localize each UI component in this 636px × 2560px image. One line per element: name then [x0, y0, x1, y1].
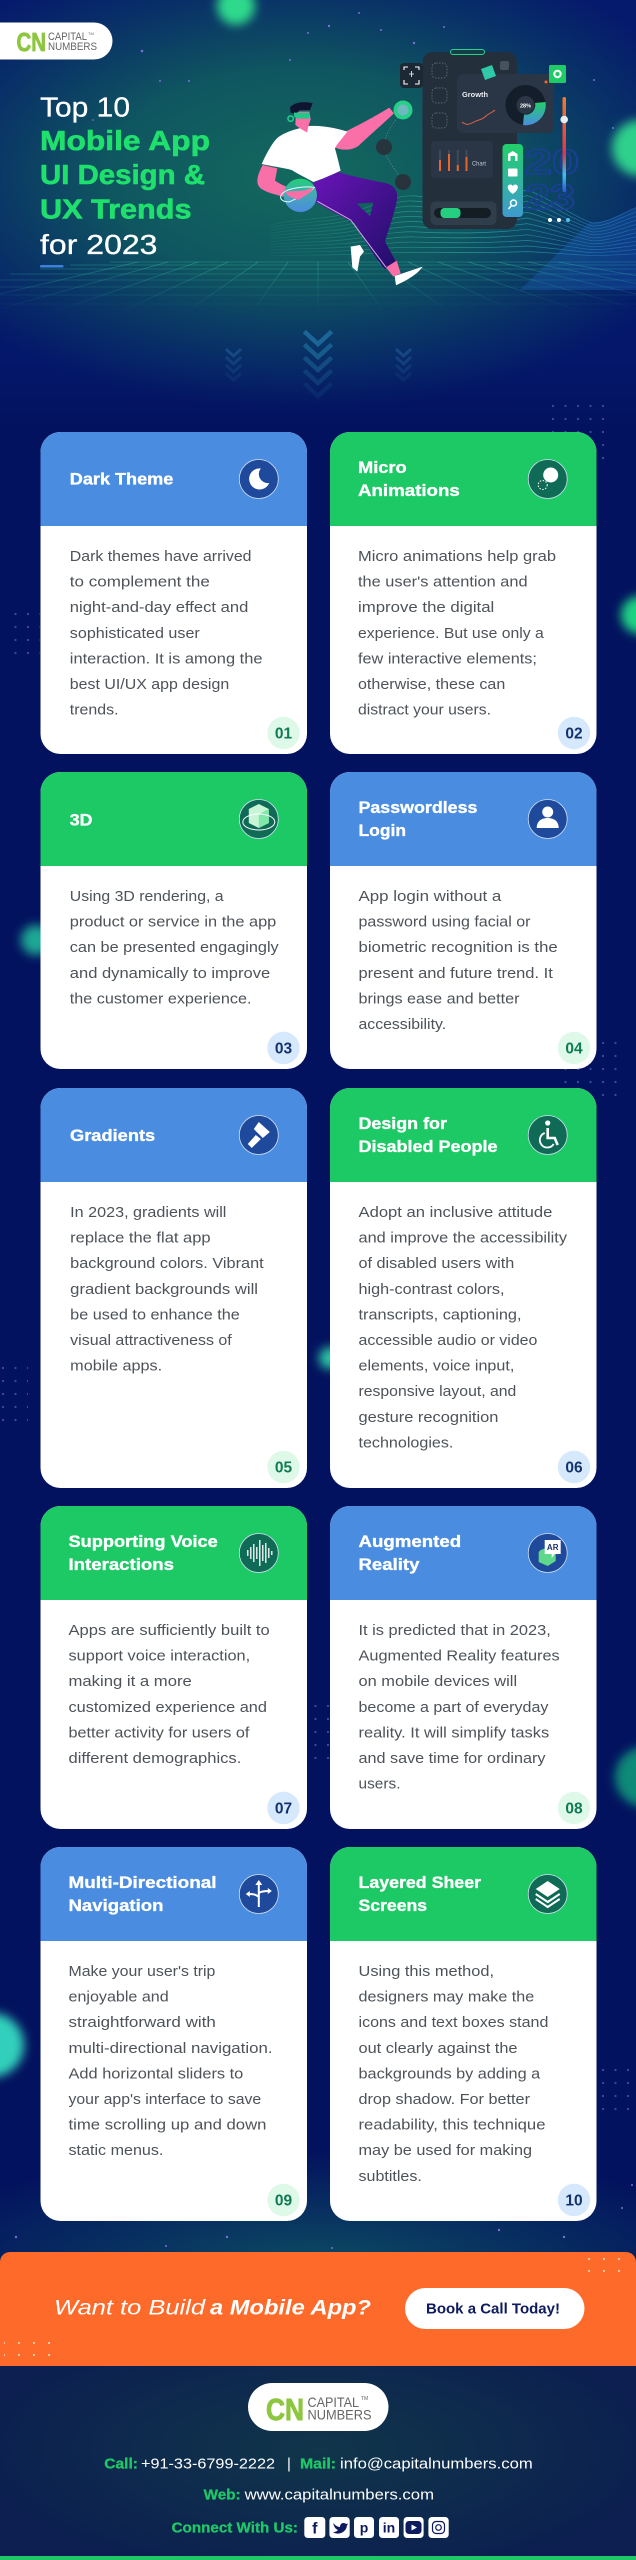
ghost 2023 numerals: [525, 143, 579, 217]
dashed placeholders: [432, 63, 447, 128]
body text: high-contrast colors,: [358, 1281, 504, 1298]
body text: static menus.: [68, 2142, 163, 2159]
body text: password using facial or: [358, 914, 530, 931]
heading: Micro: [358, 459, 407, 477]
number badge: 06: [565, 1460, 583, 1476]
panel: 01 Dark Theme: [40, 432, 307, 754]
body text: Using this method,: [358, 1963, 494, 1980]
body text: Micro animations help grab: [358, 548, 556, 565]
title: [40, 92, 210, 260]
tablet disc: [284, 179, 317, 212]
icon: moon: [239, 460, 278, 498]
heading: Design for: [358, 1115, 448, 1133]
body text: trends.: [70, 702, 118, 719]
logo badge top: CN: [16, 27, 46, 57]
body text: brings ease and better: [358, 990, 520, 1007]
hero wave mesh: [270, 190, 636, 256]
character illustration: [257, 102, 423, 285]
body text: accessible audio or video: [358, 1332, 537, 1349]
body text: accessibility.: [358, 1016, 446, 1033]
heading: Interactions: [68, 1556, 174, 1574]
body text: [70, 548, 262, 719]
title underline: [40, 265, 64, 268]
body text: be used to enhance the: [70, 1306, 240, 1323]
body text: improve the digital: [358, 599, 494, 616]
icon: sound wave: [239, 1534, 278, 1572]
body text: distract your users.: [358, 702, 491, 719]
cta button: [405, 2288, 584, 2329]
body text: Make your user's trip: [68, 1963, 215, 1980]
call to action band: [0, 2252, 636, 2366]
heading: Animations: [358, 482, 460, 500]
body text: users.: [358, 1776, 400, 1793]
body text: [358, 548, 556, 719]
icon: paint brush: [239, 1116, 278, 1154]
body text: In 2023, gradients will: [70, 1204, 226, 1221]
body text: background colors. Vibrant: [70, 1255, 265, 1272]
number badge: [267, 717, 300, 749]
number badge: [558, 2184, 590, 2216]
number badge: [267, 1032, 300, 1064]
body text: sophisticated user: [70, 625, 200, 642]
body text: Apps are sufficiently built to: [68, 1622, 270, 1639]
heading: [358, 799, 477, 840]
body text: biometric recognition is the: [358, 939, 558, 956]
icon: wheelchair: [528, 1116, 567, 1154]
body text: the customer experience.: [70, 990, 251, 1007]
body text: technologies.: [358, 1434, 453, 1451]
heading: [68, 1874, 216, 1915]
hair: [290, 102, 313, 114]
number badge: [267, 1792, 300, 1824]
body text: Add horizontal sliders to: [68, 2065, 243, 2082]
connector nodes: [376, 100, 412, 190]
navigation strip: [502, 144, 523, 217]
icon: AR cube: AR: [547, 1543, 559, 1552]
number badge: 10: [565, 2192, 583, 2210]
body text: mobile apps.: [70, 1358, 162, 1375]
contact line: call and mail: +91-33-6799-2222: [141, 2456, 275, 2472]
social links: Connect With Us:: [172, 2520, 298, 2536]
footer logo: [248, 2383, 388, 2431]
number badge: 08: [565, 1800, 583, 1818]
icon: instagram: [428, 2517, 449, 2538]
pager dots: [548, 218, 570, 222]
right ankle: [386, 261, 401, 277]
icon: directional arrows: [239, 1874, 278, 1914]
body text: making it a more: [68, 1673, 192, 1690]
heading: Screens: [358, 1897, 427, 1915]
body text: [358, 888, 558, 1033]
body text: responsive layout, and: [358, 1383, 516, 1400]
footer panel: [0, 2360, 636, 2560]
body text: to complement the: [70, 574, 210, 591]
panel: 08 Augmented Reality: [330, 1506, 596, 1829]
body text: present and future trend. It: [358, 965, 554, 982]
settings tile: [549, 65, 566, 83]
icon: 3D cube: [239, 800, 278, 838]
heading: Layered Sheer: [358, 1874, 482, 1892]
social links: [172, 2517, 449, 2538]
body text: elements, voice input,: [358, 1358, 514, 1375]
title: UI Design &: [40, 159, 205, 190]
body text: Using 3D rendering, a: [70, 888, 224, 905]
left ankle and shoe: [351, 245, 364, 272]
footer logo: NUMBERS: [308, 2406, 372, 2422]
body text: [68, 1622, 270, 1767]
body text: [358, 1622, 560, 1793]
number badge: [558, 717, 590, 749]
pants stripe: [317, 201, 386, 267]
contact line: call and mail: |: [287, 2456, 291, 2472]
scroll chevrons: [227, 333, 410, 396]
body text: and save time for ordinary: [358, 1750, 546, 1767]
face id tile: [400, 63, 423, 88]
icon: pinterest: [354, 2517, 374, 2538]
heading: 3D: [70, 812, 93, 830]
body text: multi-directional navigation.: [68, 2040, 273, 2057]
heading: Navigation: [68, 1897, 164, 1915]
body text: straightforward with: [68, 2014, 216, 2031]
body text: time scrolling up and down: [68, 2117, 266, 2134]
number badge: [267, 1451, 300, 1483]
hero perspective grid floor: [0, 262, 636, 312]
neck and head: [295, 112, 311, 133]
body text: [70, 1204, 265, 1375]
body text: gesture recognition: [358, 1409, 498, 1426]
icon: linkedin: in: [383, 2520, 395, 2536]
number badge: 09: [275, 2192, 292, 2210]
heading: Login: [358, 822, 406, 840]
body text: readability, this technique: [358, 2117, 546, 2134]
heading: [68, 1533, 218, 1574]
body text: backgrounds by adding a: [358, 2065, 541, 2082]
heading: [358, 1874, 482, 1915]
floating cube: [481, 65, 496, 80]
body text: Augmented Reality features: [358, 1648, 560, 1665]
logo badge top: [0, 22, 113, 60]
number badge: [267, 2184, 300, 2216]
heading: Passwordless: [358, 799, 477, 817]
number badge: [558, 1792, 590, 1824]
body text: your app's interface to save: [68, 2091, 261, 2108]
heading: Dark Theme: [70, 470, 173, 488]
body text: Adopt an inclusive attitude: [358, 1204, 552, 1221]
icon: user: [528, 800, 567, 838]
body text: the user's attention and: [358, 574, 528, 591]
body text: replace the flat app: [70, 1230, 211, 1247]
body text: out clearly against the: [358, 2040, 518, 2057]
body text: Dark themes have arrived: [70, 548, 251, 565]
body text: [70, 888, 279, 1007]
phone body: [422, 52, 517, 229]
title: UX Trends: [40, 194, 192, 224]
body text: customized experience and: [68, 1699, 267, 1716]
goggles: [294, 113, 309, 119]
logo badge top: NUMBERS: [48, 41, 97, 53]
pants: [313, 172, 397, 269]
body text: icons and text boxes stand: [358, 2014, 548, 2031]
decorative dot grids: [0, 402, 632, 2118]
body text: best UI/UX app design: [70, 676, 229, 693]
body text: support voice interaction,: [68, 1648, 250, 1665]
body text: night-and-day effect and: [70, 599, 248, 616]
body text: of disabled users with: [358, 1255, 514, 1272]
body text: [358, 1204, 568, 1451]
body text: enjoyable and: [68, 1989, 169, 2006]
ghost 2023 numerals: 20: [525, 143, 579, 182]
body text: can be presented engagingly: [70, 939, 279, 956]
right arm: [335, 108, 394, 150]
body text: [358, 1963, 548, 2185]
title: Top 10: [40, 92, 130, 122]
title: for 2023: [40, 229, 158, 260]
body text: become a part of everyday: [358, 1699, 549, 1716]
icon: youtube: [404, 2517, 424, 2538]
cta button: Book a Call Today!: [426, 2300, 560, 2318]
white shirt: [262, 126, 347, 182]
panel: 09 Multi-Directional Navigation: [40, 1847, 307, 2221]
icon: pinterest: p: [360, 2520, 368, 2536]
body text: reality. It will simplify tasks: [358, 1724, 549, 1741]
phone UI illustration: [376, 50, 570, 229]
panel: 03 3D: [40, 772, 307, 1069]
cta headline: Want to Build: [54, 2296, 207, 2320]
body text: App login without a: [358, 888, 502, 905]
phone notch: [450, 50, 484, 54]
panel: 05 Gradients: [40, 1088, 307, 1488]
cta headline: a Mobile App?: [210, 2296, 371, 2320]
body text: better activity for users of: [68, 1724, 250, 1741]
donut chart: 28%: [520, 104, 531, 110]
growth card: [457, 74, 554, 133]
heading: [358, 1115, 498, 1156]
contact line: call and mail: info@capitalnumbers.com: [340, 2456, 533, 2472]
body text: transcripts, captioning,: [358, 1306, 521, 1323]
body text: on mobile devices will: [358, 1673, 517, 1690]
bar chart card: [431, 141, 493, 178]
contact line: call and mail: Mail:: [300, 2456, 336, 2472]
ghost 2023 numerals: 23: [525, 178, 575, 217]
hero right blue wash: [520, 208, 636, 290]
bottom green strip: [0, 2556, 636, 2560]
heading: Gradients: [70, 1127, 155, 1145]
bottom progress bar: [430, 202, 496, 225]
contact line: web: Web:: [204, 2486, 241, 2504]
body text: otherwise, these can: [358, 676, 505, 693]
number badge: 07: [275, 1800, 292, 1818]
footer logo: TM: [361, 2396, 368, 2402]
vertical slider: [560, 97, 568, 192]
heading: Supporting Voice: [68, 1533, 218, 1551]
logo badge top: TM: [88, 31, 94, 36]
icon: facebook: [304, 2517, 325, 2538]
icon: layers: [528, 1874, 567, 1914]
growth card: Growth: [462, 90, 488, 99]
body text: visual attractiveness of: [70, 1332, 233, 1349]
body text: experience. But use only a: [358, 625, 544, 642]
icon: linkedin: [379, 2517, 399, 2538]
title: Mobile App: [40, 125, 210, 156]
body text: gradient backgrounds will: [70, 1281, 258, 1298]
icon: twitter: [329, 2517, 350, 2538]
number badge: 05: [275, 1460, 292, 1476]
body text: and improve the accessibility: [358, 1230, 568, 1247]
number badge: [558, 1032, 590, 1064]
heading: Disabled People: [358, 1138, 498, 1156]
left arm: [257, 165, 307, 201]
number badge: [558, 1451, 590, 1483]
heading: [358, 459, 460, 500]
icon: facebook: f: [312, 2520, 318, 2538]
icon: micro animation: [528, 460, 567, 498]
body text: designers may make the: [358, 1989, 534, 2006]
number badge: 02: [565, 726, 583, 742]
number badge: 04: [565, 1040, 583, 1058]
contact line: call and mail: Call:: [104, 2456, 138, 2472]
panel: 06 Design for Disabled People: [330, 1088, 596, 1488]
body text: and dynamically to improve: [70, 965, 270, 982]
contact line: call and mail: [104, 2456, 533, 2472]
body text: product or service in the app: [70, 914, 276, 931]
panel: 02 Micro Animations: [330, 432, 596, 754]
logo badge top: CAPITAL: [48, 31, 87, 43]
right shoe: [395, 267, 423, 285]
body text: It is predicted that in 2023,: [358, 1622, 551, 1639]
footer logo: CN: [266, 2392, 304, 2427]
bar chart card: Chart: [472, 162, 486, 168]
orange dot: [544, 80, 548, 84]
heading: Reality: [358, 1556, 420, 1574]
body text: drop shadow. For better: [358, 2091, 530, 2108]
contact line: web: www.capitalnumbers.com: [243, 2486, 434, 2504]
heading: Augmented: [358, 1533, 461, 1551]
number badge: 03: [275, 1040, 292, 1058]
panel: 04 Passwordless Login: [330, 772, 596, 1069]
panel: 07 Supporting Voice Interactions: [40, 1506, 307, 1829]
dark tile: [500, 61, 509, 70]
icon: AR cube: [528, 1534, 567, 1572]
body text: few interactive elements;: [358, 650, 537, 667]
body text: [68, 1963, 272, 2159]
heading: [358, 1533, 461, 1574]
body text: interaction. It is among the: [70, 650, 262, 667]
panel: 10 Layered Sheer Screens: [330, 1847, 596, 2221]
heading: Multi-Directional: [68, 1874, 216, 1892]
body text: different demographics.: [68, 1750, 241, 1767]
body text: subtitles.: [358, 2168, 422, 2185]
number badge: 01: [275, 726, 292, 742]
footer logo: CAPITAL: [308, 2394, 359, 2410]
body text: may be used for making: [358, 2142, 532, 2159]
